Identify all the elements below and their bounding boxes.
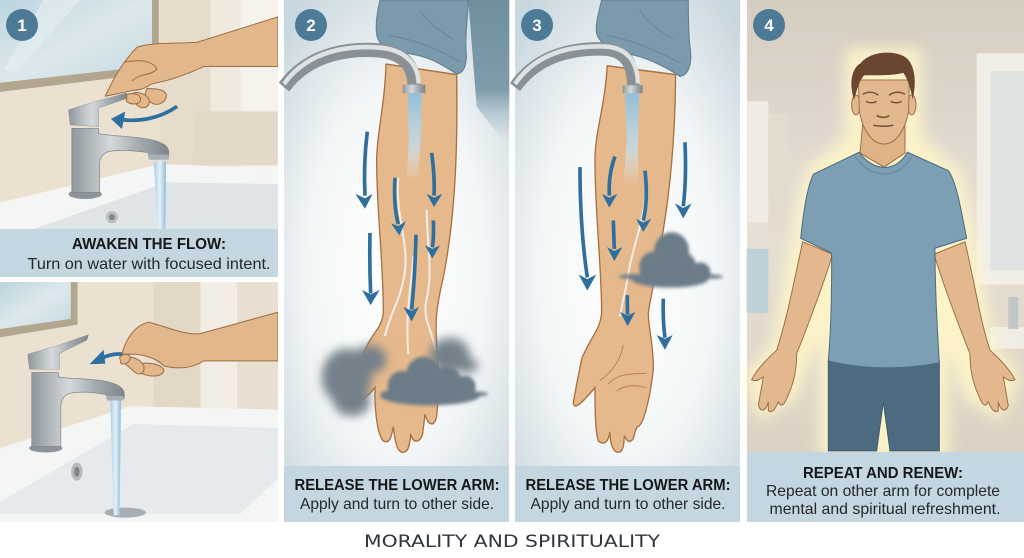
panel: step 1 faucet running (bottom)	[0, 282, 278, 522]
caption: awaken the flow: AWAKEN THE FLOW:	[72, 236, 226, 253]
arms and hands	[752, 242, 1015, 412]
neck	[860, 124, 905, 167]
arrow heads	[579, 194, 692, 350]
faucet	[28, 335, 124, 453]
sleeve	[596, 0, 691, 76]
badge: step 2: 2	[306, 16, 316, 35]
arrow: turn on	[124, 106, 177, 120]
sink	[0, 406, 278, 522]
water rivulets	[620, 178, 645, 316]
arrows falling	[580, 142, 686, 338]
palm lines	[600, 345, 647, 391]
sleeve	[376, 0, 468, 74]
forearm and hand	[573, 66, 676, 452]
panel: step 3 arm turned over	[515, 0, 740, 466]
arrow heads	[355, 194, 442, 321]
caption: release the lower arm (step 3): RELEASE THE LOWER ARM:	[526, 477, 730, 494]
dust cloud front	[380, 357, 488, 405]
badge: step 4: 4	[764, 16, 774, 35]
badge: step 4	[753, 9, 785, 41]
mirror	[0, 0, 159, 92]
caption: release the lower arm (step 2): Apply and turn to other side.	[300, 496, 494, 513]
caption: release the lower arm (step 3)	[515, 466, 740, 522]
water stream	[407, 93, 422, 181]
glow	[753, 57, 1010, 452]
faucet	[515, 46, 643, 93]
title: MORALITY AND SPIRITUALITY	[364, 532, 661, 552]
sink counter	[0, 164, 278, 229]
dust cloud back	[322, 338, 478, 416]
badge: step 3: 3	[532, 16, 542, 35]
water stream	[623, 93, 639, 185]
head	[858, 80, 909, 144]
panel: step 2 arm under water	[284, 0, 509, 466]
caption: repeat and renew	[747, 452, 1024, 522]
ears	[852, 95, 916, 115]
water stream	[154, 161, 166, 229]
bathroom background	[747, 53, 1024, 348]
faucet	[284, 47, 425, 93]
towel	[192, 111, 278, 166]
badge: step 1: 1	[17, 16, 27, 35]
faucet	[68, 93, 169, 199]
hair	[851, 53, 915, 100]
forearm and hand	[352, 64, 457, 452]
t-shirt	[801, 152, 967, 368]
sleeve shadow strip	[468, 0, 509, 149]
arrow: turn off	[102, 354, 122, 358]
badge: step 2	[295, 9, 327, 41]
caption: repeat and renew: mental and spiritual refreshment.	[770, 501, 1000, 518]
water rivulets	[385, 178, 435, 354]
panel: step 1 turn on the faucet (top)	[0, 0, 278, 229]
collar	[855, 156, 912, 174]
panel: step 4 renewed person	[747, 0, 1024, 452]
badge: step 1	[6, 9, 38, 41]
hand	[120, 312, 278, 376]
face	[863, 92, 905, 126]
badge: step 3	[521, 9, 553, 41]
caption: release the lower arm (step 2)	[284, 466, 509, 522]
caption: awaken the flow	[0, 229, 278, 277]
hand	[105, 17, 278, 108]
caption: release the lower arm (step 3): Apply and turn to other side.	[530, 496, 726, 513]
caption: release the lower arm (step 2): RELEASE THE LOWER ARM:	[294, 477, 500, 494]
mirror	[0, 282, 78, 337]
arrows falling	[365, 132, 434, 309]
caption: repeat and renew: Repeat on other arm for complete	[766, 483, 1000, 500]
trousers	[828, 361, 939, 451]
water stream	[110, 399, 121, 515]
caption: repeat and renew: REPEAT AND RENEW:	[803, 465, 963, 482]
caption: awaken the flow: Turn on water with focused intent.	[28, 256, 270, 273]
dust cloud	[618, 232, 723, 288]
